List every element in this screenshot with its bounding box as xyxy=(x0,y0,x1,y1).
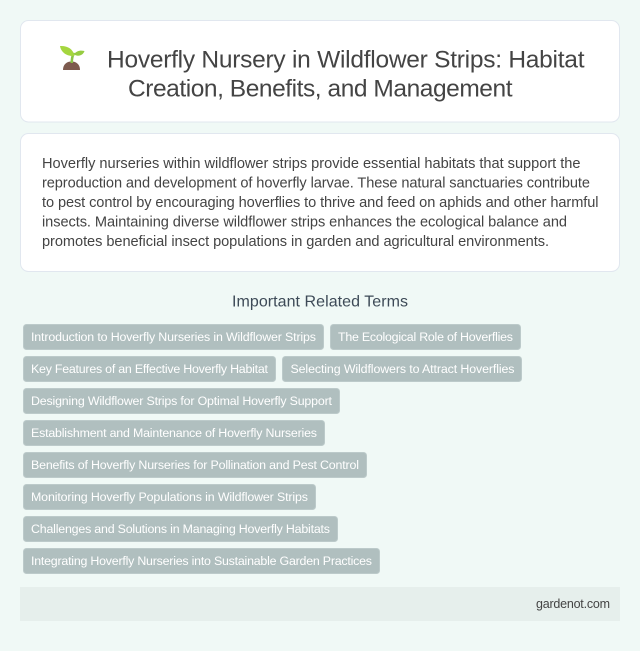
chip: benefits: Benefits of Hoverfly Nurseries for Pollination and Pest Control xyxy=(31,458,359,472)
chip: integrating xyxy=(24,548,380,574)
text block: description: to pest control by encouraging hoverflies to thrive and feed on aphids and other harmful xyxy=(42,195,598,211)
chip: introduction: Introduction to Hoverfly Nurseries in Wildflower Strips xyxy=(31,330,316,344)
chip: introduction xyxy=(24,324,324,350)
chip: key features: Key Features of an Effective Hoverfly Habitat xyxy=(31,362,269,376)
chip: designing strips: Designing Wildflower Strips for Optimal Hoverfly Support xyxy=(31,394,333,408)
footer xyxy=(20,587,620,621)
heading: title xyxy=(107,46,585,102)
chip: challenges xyxy=(24,516,338,542)
footer text: site name: gardenot.com xyxy=(536,597,610,611)
text block: description: promotes beneficial insect populations in garden and agricultural environments. xyxy=(42,234,549,250)
chip: monitoring xyxy=(24,484,316,510)
heading: title: Hoverfly Nursery in Wildflower Strips: Habitat xyxy=(107,46,585,74)
text block: description: insects. Maintaining diverse wildflower strips enhances the ecological balance and xyxy=(42,214,567,230)
heading: important related terms: Important Related Terms xyxy=(232,294,408,310)
icon: seedling xyxy=(60,46,84,70)
text block: description: reproduction and development of hoverfly larvae. These natural sanctuaries contribute xyxy=(42,176,590,192)
chip: selecting wildflowers: Selecting Wildflowers to Attract Hoverflies xyxy=(290,362,514,376)
chip: challenges: Challenges and Solutions in Managing Hoverfly Habitats xyxy=(31,522,330,536)
chip: ecological role xyxy=(330,324,520,350)
panel: term chips xyxy=(24,324,522,574)
chip: designing strips xyxy=(24,388,340,414)
chip: establishment xyxy=(24,420,324,446)
panel: description card xyxy=(20,134,620,272)
chip: integrating: Integrating Hoverfly Nurseries into Sustainable Garden Practices xyxy=(31,554,372,568)
chip: key features xyxy=(24,356,276,382)
chip: selecting wildflowers xyxy=(282,356,522,382)
chip: establishment: Establishment and Maintenance of Hoverfly Nurseries xyxy=(31,426,317,440)
heading: title: Creation, Benefits, and Management xyxy=(128,76,513,102)
chip: monitoring: Monitoring Hoverfly Populations in Wildflower Strips xyxy=(31,490,308,504)
chip: ecological role: The Ecological Role of Hoverflies xyxy=(338,330,513,344)
text block: description xyxy=(42,156,598,250)
text block: description: Hoverfly nurseries within wildflower strips provide essential habitats that support the xyxy=(42,156,580,172)
chip: benefits xyxy=(24,452,366,478)
panel: title card xyxy=(20,20,620,122)
